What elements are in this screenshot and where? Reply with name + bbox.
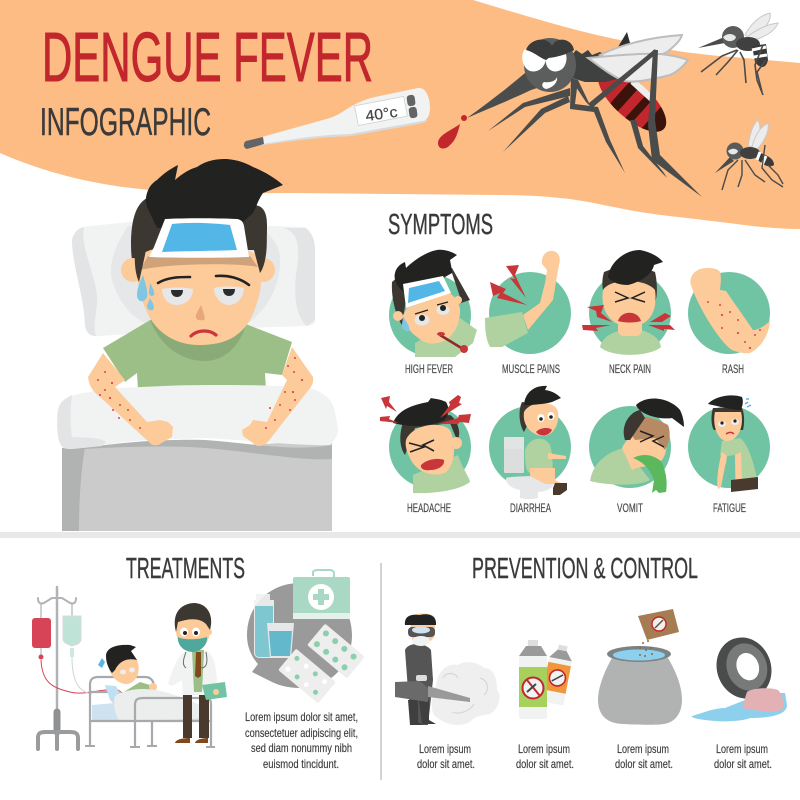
prevention text 3 xyxy=(615,742,673,771)
treatment text: euismod tincidunt. xyxy=(263,757,339,771)
cold patch xyxy=(149,218,249,258)
bed base xyxy=(62,440,332,531)
label: RASH xyxy=(722,362,744,376)
prevention: tyre and bowl xyxy=(692,630,787,721)
fogger xyxy=(395,681,428,702)
prevention text 4: dolor sit amet. xyxy=(714,757,772,771)
treatment text: sed diam nonummy nibh xyxy=(251,741,352,755)
head xyxy=(524,38,576,92)
prevention text 2: Lorem ipsum xyxy=(518,742,570,756)
pillow xyxy=(72,222,315,336)
front bottle xyxy=(519,656,547,719)
tyre xyxy=(708,630,780,706)
icon: big mosquito xyxy=(438,32,702,197)
icon: thermometer xyxy=(244,88,430,149)
forehead shade xyxy=(140,256,258,270)
symptom: vomit xyxy=(589,399,684,493)
bowl xyxy=(742,688,783,711)
wings xyxy=(600,35,682,63)
bed front frame xyxy=(91,698,215,747)
bottle xyxy=(254,594,274,658)
pillow shade behind head xyxy=(111,226,280,325)
prevention text 4: Lorem ipsum xyxy=(716,742,768,756)
hair side xyxy=(131,198,267,282)
prevention text 2 xyxy=(516,742,574,771)
title: DENGUE FEVER xyxy=(42,18,373,96)
legs xyxy=(488,49,702,197)
prevention text 3: Lorem ipsum xyxy=(617,742,669,756)
icon: thermometer: 40°c xyxy=(364,104,399,125)
prevention text 3: dolor sit amet. xyxy=(615,757,673,771)
icon: small mosquito top xyxy=(698,13,778,95)
symptom: muscle pains xyxy=(485,251,571,354)
treatment text: consectetuer adipiscing elit, xyxy=(245,726,358,740)
glass xyxy=(267,623,294,658)
heading: treatments: TREATMENTS xyxy=(126,553,245,585)
blood bag xyxy=(32,618,51,648)
label: MUSCLE PAINS xyxy=(502,362,560,376)
prevention: repellent bottles xyxy=(519,640,575,719)
head xyxy=(410,614,435,644)
symptom: diarrhea xyxy=(489,386,571,499)
granules xyxy=(639,640,653,657)
doctor xyxy=(183,692,192,738)
right arm xyxy=(242,347,313,446)
patient xyxy=(122,682,152,697)
hair top xyxy=(146,159,283,228)
peach header background xyxy=(0,0,800,229)
left arm xyxy=(88,353,173,445)
symptom: neck pain xyxy=(582,250,675,355)
blood drop xyxy=(438,124,460,149)
sachet xyxy=(638,609,679,640)
icon: small mosquito bottom xyxy=(715,120,783,190)
section divider band xyxy=(0,532,800,538)
blister pack 1 xyxy=(307,624,365,678)
sweat drops xyxy=(137,275,147,301)
mattress xyxy=(92,703,208,721)
label: HEADACHE xyxy=(407,501,451,515)
label: DIARRHEA xyxy=(510,501,551,515)
prevention text 1: Lorem ipsum xyxy=(419,742,471,756)
blister pack 2 xyxy=(278,649,336,703)
label: FATIGUE xyxy=(713,501,746,515)
medical kit xyxy=(313,570,334,577)
prevention: pot and larvicide xyxy=(598,609,682,725)
illustration: sick boy in bed xyxy=(57,159,338,531)
prevention text 2: dolor sit amet. xyxy=(516,757,574,771)
blanket xyxy=(57,385,338,449)
subtitle: INFOGRAPHIC xyxy=(40,101,211,144)
prevention: fogging man xyxy=(395,614,500,725)
symptom: high fever xyxy=(389,250,477,357)
abdomen xyxy=(598,79,666,132)
treatment text: Lorem ipsum dolor sit amet, xyxy=(245,710,358,724)
symptom: fatigue xyxy=(688,395,770,492)
symptom: headache xyxy=(380,395,471,493)
illustration: medicine xyxy=(247,570,365,703)
face xyxy=(138,244,261,345)
prevention text 1: dolor sit amet. xyxy=(417,757,475,771)
ears xyxy=(121,258,145,282)
hair top xyxy=(395,250,457,293)
eyebrows xyxy=(158,277,190,283)
symptom: rash xyxy=(688,268,770,354)
eyes xyxy=(162,288,193,305)
label: VOMIT xyxy=(617,501,643,515)
proboscis xyxy=(467,73,540,118)
thorax xyxy=(572,50,622,82)
bed rear frame xyxy=(85,677,157,746)
saline bag xyxy=(63,616,81,646)
pot xyxy=(598,658,682,725)
heading: symptoms: SYMPTOMS xyxy=(388,209,493,241)
smoke xyxy=(432,662,500,725)
IV stand xyxy=(38,587,78,749)
label: HIGH FEVER xyxy=(405,362,453,376)
shirt xyxy=(103,319,292,390)
grey speech circle xyxy=(247,583,352,688)
vertical divider xyxy=(380,563,382,780)
prevention text 1 xyxy=(417,742,475,771)
blanket xyxy=(114,689,208,720)
label: NECK PAIN xyxy=(609,362,651,376)
puddle xyxy=(692,693,787,721)
back bottle xyxy=(541,643,575,706)
rash dots xyxy=(97,357,303,429)
nose xyxy=(196,305,205,320)
mouth xyxy=(191,331,216,336)
treatment text xyxy=(245,710,358,771)
clipboard xyxy=(202,682,227,700)
tubes xyxy=(41,660,125,695)
prevention text 4 xyxy=(714,742,772,771)
illustration: IV stand, bed, patient, doctor xyxy=(32,587,227,749)
